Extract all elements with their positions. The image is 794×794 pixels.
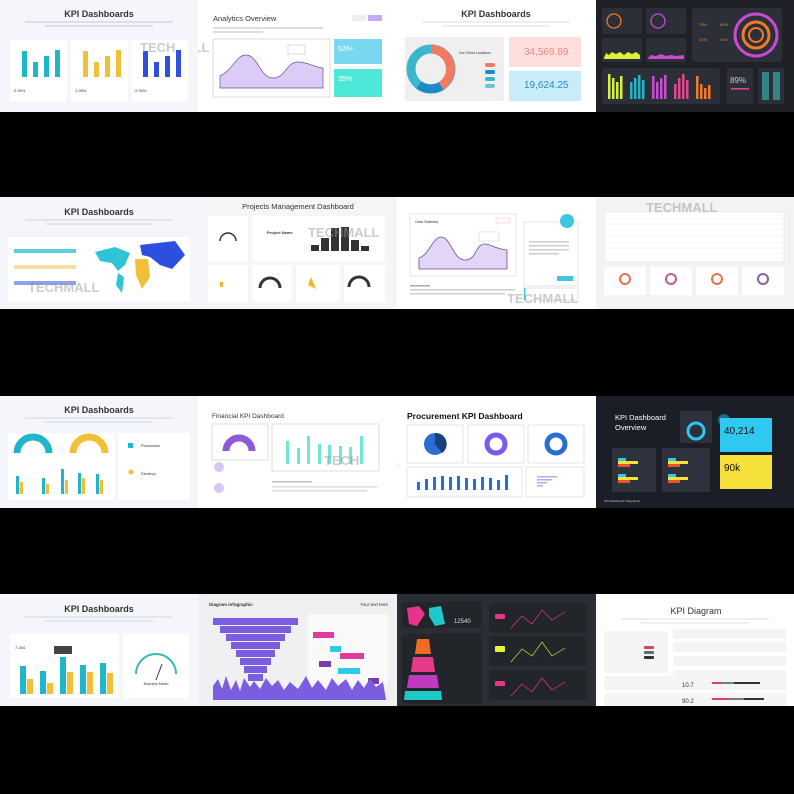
donut card xyxy=(405,37,504,101)
gantt xyxy=(308,614,388,686)
tile: dark KPI overview: 40,214 xyxy=(724,426,755,437)
heading: Projects Management Dashboard xyxy=(242,202,354,211)
tile: KPI dashboards bar cards xyxy=(0,0,198,112)
stat cards: 34,569.89 xyxy=(524,47,569,58)
tile: projects management: TECHMALL xyxy=(308,225,380,240)
tile: projects management xyxy=(199,197,397,309)
stat cards: 35% xyxy=(338,76,352,83)
tile: dark dashboard: 31% xyxy=(699,37,707,42)
heading: Financial KPI Dashboard xyxy=(212,413,284,420)
bar cards xyxy=(10,40,188,101)
data analysis text xyxy=(410,285,515,294)
line chart card xyxy=(410,214,516,276)
tile: KPI dashboards map: KPI Dashboards xyxy=(64,207,134,217)
tile: dark pyramid xyxy=(397,594,596,706)
tile: procurement KPI xyxy=(397,396,596,508)
stat cards xyxy=(334,39,382,97)
progress and map card xyxy=(8,237,190,301)
tile: KPI gauges: Production xyxy=(141,443,160,448)
offline card xyxy=(524,214,578,286)
stat cards: 19,624.25 xyxy=(524,80,569,91)
tile: KPI dashboards map xyxy=(0,197,198,309)
tile: KPI diagram: 90.2 xyxy=(682,699,694,705)
heading: Procurement KPI Dashboard xyxy=(407,411,523,421)
pyramid xyxy=(404,639,442,700)
tile: KPI bars and gauge: 7,284 xyxy=(15,645,26,650)
title: KPI Dashboards xyxy=(64,9,134,19)
tile: dark dashboard: 89% xyxy=(730,76,746,85)
tile: KPI bars and gauge: Business Model xyxy=(144,682,169,686)
tile: KPI dashboards map: TECHMALL xyxy=(28,280,100,295)
bar cards: 1.28% xyxy=(75,88,87,93)
tile: client locations xyxy=(397,0,596,112)
tile: diagram infographic xyxy=(199,594,397,706)
bar cards: 2.04% xyxy=(135,88,147,93)
tile: KPI bars and gauge: KPI Dashboards xyxy=(64,604,134,614)
heading: KPI Diagram xyxy=(670,606,722,616)
stat cards xyxy=(509,37,581,101)
heading: Diagram infographic xyxy=(209,602,253,607)
tile: KPI gauges xyxy=(0,396,198,508)
line chart card: Case Statistics xyxy=(415,220,438,224)
tile: KPI gauges: KPI Dashboards xyxy=(64,405,134,415)
tile: case statistics: TECHMALL xyxy=(507,291,579,306)
tile: dark KPI overview: 90k xyxy=(724,463,741,474)
donut cards xyxy=(604,267,784,295)
tile: dark dashboard: 78% xyxy=(699,22,707,27)
heading: Analytics Overview xyxy=(213,14,277,23)
area chart xyxy=(213,39,330,97)
tile: KPI gauges: Develop xyxy=(141,471,156,476)
tile: financial KPI xyxy=(198,396,397,508)
tile: analytics overview xyxy=(198,0,397,112)
tile: dark KPI overview: KPI Dashboard Infographic xyxy=(604,499,641,503)
tile: table with donuts: TECHMALL xyxy=(646,200,718,215)
tile: KPI diagram xyxy=(596,594,794,706)
stat cards: 526+ xyxy=(338,46,354,53)
tile: table with donuts xyxy=(596,197,794,309)
tile: dark KPI overview xyxy=(596,396,794,508)
donut card: Our Client Locations xyxy=(459,51,491,55)
tile: case statistics xyxy=(397,197,596,309)
bar cards: 2.45% xyxy=(14,88,26,93)
tile: KPI diagram: 10.7 xyxy=(682,683,694,689)
wave chart xyxy=(213,676,386,700)
tile: dark dashboard xyxy=(596,0,794,112)
tile: dark dashboard: 84% xyxy=(720,22,728,27)
tile: dark pyramid: 12540 xyxy=(454,619,471,625)
tile: KPI dashboards bar cards: TECH xyxy=(140,40,175,55)
table xyxy=(604,212,784,262)
heading: KPI Dashboard xyxy=(615,413,666,422)
tile: projects management: Project Name xyxy=(267,230,293,235)
funnel xyxy=(213,618,298,681)
tile: dark dashboard: 61% xyxy=(720,37,728,42)
tile: client locations: KPI Dashboards xyxy=(461,9,531,19)
tile: diagram infographic: Your text here xyxy=(360,602,388,607)
tile: financial KPI: TECH xyxy=(324,453,359,468)
tile: KPI bars and gauge xyxy=(0,594,198,706)
tile: dark KPI overview: Overview xyxy=(615,423,647,432)
